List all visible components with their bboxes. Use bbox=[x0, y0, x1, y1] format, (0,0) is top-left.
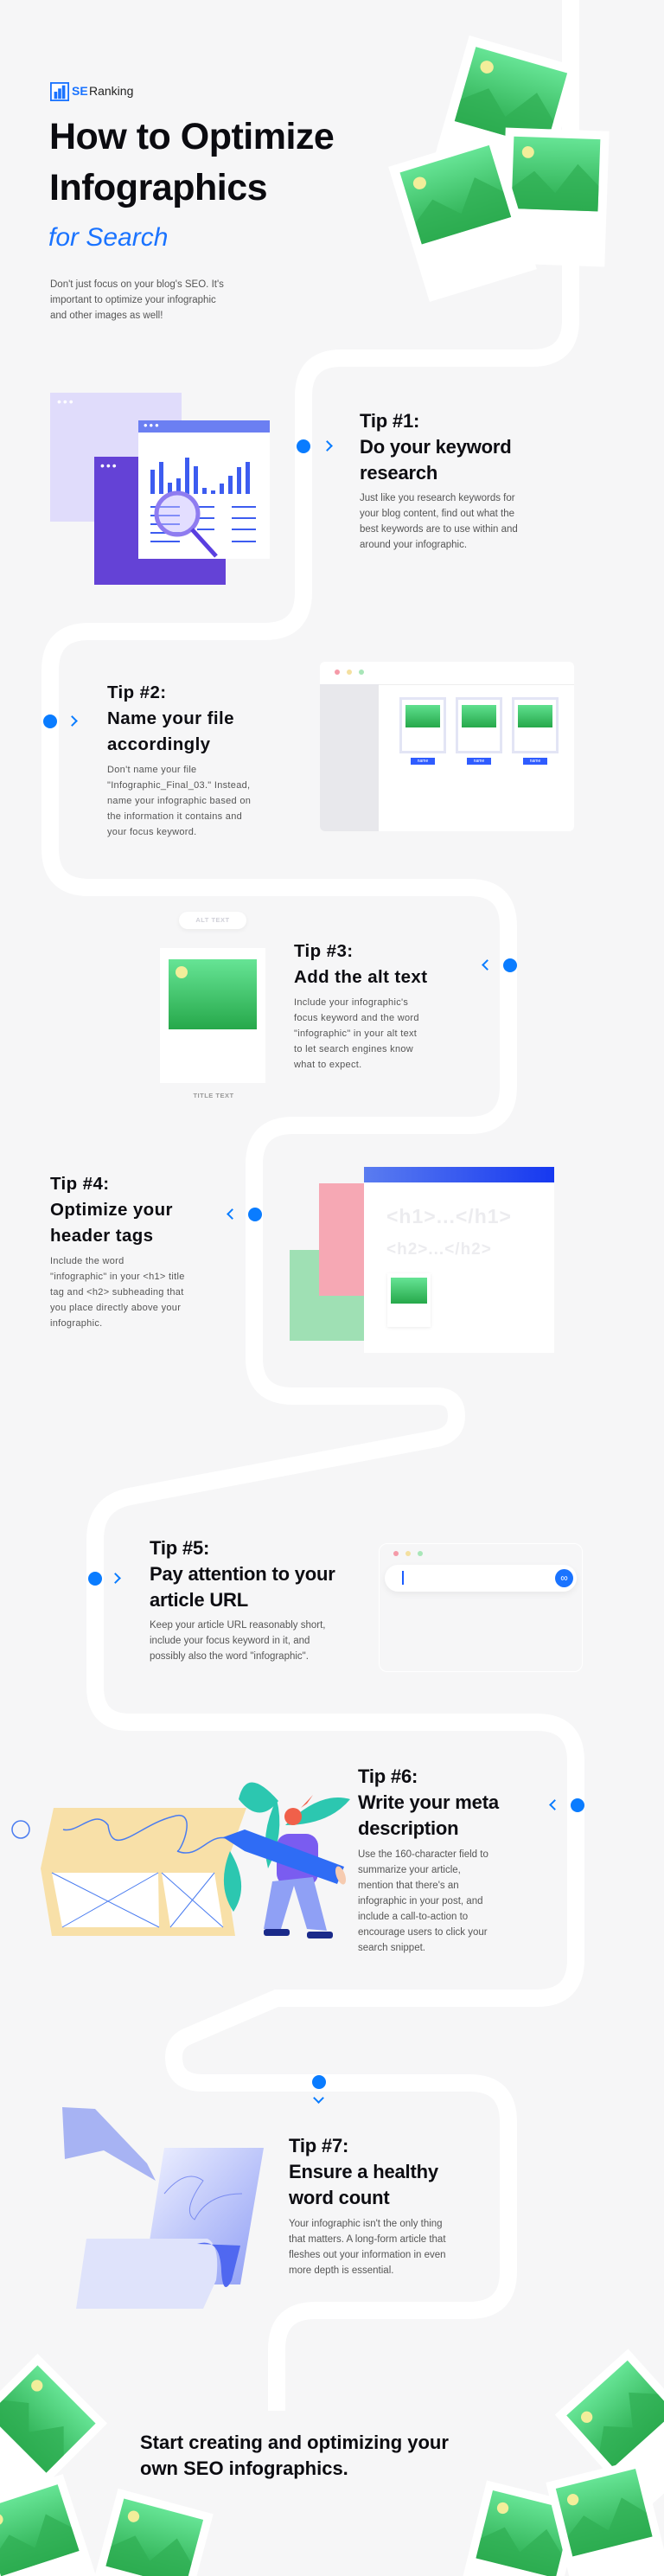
tip 3 text: to let search engines know bbox=[294, 1044, 413, 1054]
tip 2 text: Don't name your file bbox=[107, 765, 196, 775]
tip 4 text: "infographic" in your <h1> title bbox=[50, 1272, 185, 1282]
tip 3 text: Tip #3: bbox=[294, 941, 353, 961]
tip 5 text: Tip #5: bbox=[150, 1537, 209, 1559]
tip 5 text: Pay attention to your bbox=[150, 1563, 335, 1585]
intro text: and other images as well! bbox=[50, 311, 163, 321]
tip 2 text: the information it contains and bbox=[107, 811, 242, 822]
intro text: important to optimize your infographic bbox=[50, 295, 216, 305]
URL browser card bbox=[379, 1543, 583, 1672]
browser with files: name bbox=[530, 759, 540, 764]
tip 2 text: "Infographic_Final_03." Instead, bbox=[107, 780, 250, 791]
tip 3 text bbox=[294, 941, 427, 1070]
closing headline: Start creating and optimizing your own SEO infographics. bbox=[140, 2432, 449, 2479]
tip 3 text: Include your infographic's bbox=[294, 997, 408, 1008]
tip 7 marker bbox=[312, 2075, 326, 2104]
tip 6 text: mention that there's an bbox=[358, 1881, 459, 1891]
tip 7 text: that matters. A long-form article that bbox=[289, 2234, 446, 2245]
intro text: Don't just focus on your blog's SEO. It's bbox=[50, 279, 224, 290]
tip 7 text bbox=[289, 2135, 446, 2276]
tip 1 text: Just like you research keywords for bbox=[360, 493, 515, 503]
tip 4 text: Optimize your bbox=[50, 1200, 173, 1220]
tip 5 text: possibly also the word "infographic". bbox=[150, 1651, 309, 1662]
tip 6 text: infographic in your post, and bbox=[358, 1896, 482, 1906]
URL browser card: ∞ bbox=[560, 1572, 568, 1584]
tip 5 marker bbox=[88, 1572, 121, 1586]
tip 4 text: you place directly above your bbox=[50, 1303, 181, 1313]
illustration: keyword research bbox=[50, 393, 270, 585]
browser with files: name bbox=[418, 759, 428, 764]
browser with files bbox=[320, 662, 574, 831]
tip 1 text: around your infographic. bbox=[360, 540, 467, 550]
alt text illustration: TITLE TEXT bbox=[193, 1092, 234, 1099]
tip 6 text: Tip #6: bbox=[358, 1765, 418, 1787]
tip 6 text bbox=[358, 1765, 500, 1953]
tip 5 text: Keep your article URL reasonably short, bbox=[150, 1620, 325, 1631]
tip 6 text: search snippet. bbox=[358, 1943, 425, 1953]
tip 7 text: word count bbox=[289, 2187, 390, 2208]
illustration: keyword research: ••• bbox=[100, 458, 118, 472]
tip 2 marker bbox=[43, 714, 78, 728]
title: Infographics bbox=[49, 167, 267, 208]
tip 1 text bbox=[360, 410, 518, 550]
tip 4 text: header tags bbox=[50, 1226, 153, 1246]
tip 1 marker bbox=[297, 439, 333, 453]
tip 6 text: include a call-to-action to bbox=[358, 1912, 468, 1922]
tip 2 text: accordingly bbox=[107, 734, 210, 754]
header tags illustration: <h1>...</h1> bbox=[386, 1205, 512, 1227]
logo: SE bbox=[72, 84, 88, 98]
tip 2 text: name your infographic based on bbox=[107, 796, 251, 806]
tip 6 text: Use the 160-character field to bbox=[358, 1849, 488, 1860]
logo: Ranking bbox=[89, 84, 133, 98]
title bbox=[49, 116, 334, 208]
tip 3 text: "infographic" in your alt text bbox=[294, 1028, 417, 1039]
tip 4 text: tag and <h2> subheading that bbox=[50, 1287, 184, 1298]
header tags illustration bbox=[290, 1167, 554, 1353]
tip 3 text: focus keyword and the word bbox=[294, 1013, 419, 1023]
subtitle: for Search bbox=[48, 223, 168, 252]
header tags illustration: <h2>...</h2> bbox=[386, 1240, 492, 1259]
tip 2 text: Name your file bbox=[107, 708, 234, 728]
tip 7 text: Your infographic isn't the only thing bbox=[289, 2219, 443, 2229]
tip 3 marker bbox=[482, 958, 517, 972]
tip 4 text: Include the word bbox=[50, 1256, 124, 1266]
alt text illustration bbox=[160, 912, 265, 1099]
tip 6 text: summarize your article, bbox=[358, 1865, 461, 1875]
illustration: keyword research: ••• bbox=[144, 419, 161, 432]
tip 4 marker bbox=[227, 1208, 262, 1221]
tip 7 text: Tip #7: bbox=[289, 2135, 348, 2156]
tip 1 text: research bbox=[360, 462, 437, 484]
illustration: keyword research: ••• bbox=[57, 394, 75, 408]
tip 4 text: Tip #4: bbox=[50, 1174, 109, 1194]
tip 2 text bbox=[107, 682, 251, 837]
title: How to Optimize bbox=[49, 116, 334, 157]
tip 1 text: Do your keyword bbox=[360, 436, 511, 458]
tip 6 text: description bbox=[358, 1817, 458, 1839]
tip 4 text: infographic. bbox=[50, 1318, 102, 1329]
intro text bbox=[50, 279, 224, 321]
tip 3 text: what to expect. bbox=[294, 1060, 361, 1070]
tip 1 text: your blog content, find out what the bbox=[360, 509, 514, 519]
tip 6 illustration bbox=[11, 1782, 350, 1938]
browser with files: name bbox=[474, 759, 484, 764]
tip 7 text: more depth is essential. bbox=[289, 2265, 393, 2276]
tip 5 text bbox=[150, 1537, 335, 1662]
tip 7 text: Ensure a healthy bbox=[289, 2161, 438, 2182]
tip 6 marker bbox=[549, 1798, 584, 1812]
tip 2 text: Tip #2: bbox=[107, 682, 166, 702]
tip 6 text: Write your meta bbox=[358, 1791, 499, 1813]
logo bbox=[50, 82, 133, 101]
tip 1 text: best keywords are to use within and bbox=[360, 524, 518, 535]
tip 7 text: fleshes out your information in even bbox=[289, 2250, 446, 2260]
tip 1 text: Tip #1: bbox=[360, 410, 419, 432]
tip 6 text: encourage users to click your bbox=[358, 1927, 488, 1938]
tip 2 text: your focus keyword. bbox=[107, 827, 197, 837]
tip 5 text: article URL bbox=[150, 1589, 248, 1611]
alt text illustration: ALT TEXT bbox=[195, 916, 230, 924]
tip 4 text bbox=[50, 1174, 185, 1329]
tip 5 text: include your focus keyword in it, and bbox=[150, 1636, 310, 1646]
photos: top bbox=[389, 36, 609, 301]
tip 3 text: Add the alt text bbox=[294, 967, 427, 987]
